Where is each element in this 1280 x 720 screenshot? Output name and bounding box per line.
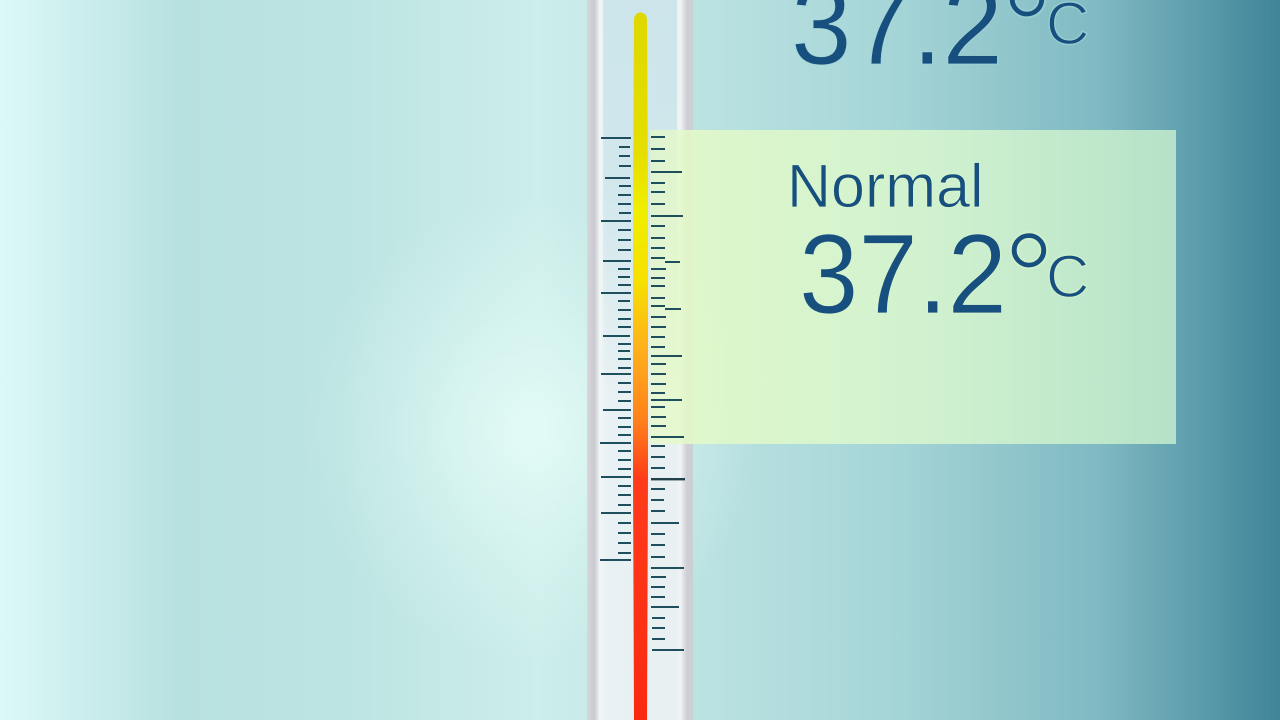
left scale ticks	[600, 138, 631, 560]
thick scale tick	[651, 478, 685, 480]
panel temperature reading: 37.2	[799, 211, 1007, 337]
mercury column	[633, 12, 648, 720]
glass tube	[587, 0, 693, 720]
panel label: Normal: Normal	[787, 152, 984, 220]
thermometer	[587, 0, 693, 720]
normal range panel	[650, 130, 1176, 444]
panel temperature reading: C	[1046, 243, 1089, 310]
right scale ticks	[651, 137, 684, 650]
panel temperature reading: °	[1003, 205, 1055, 351]
panel temperature reading	[799, 205, 1089, 351]
top temperature reading	[791, 0, 1089, 100]
